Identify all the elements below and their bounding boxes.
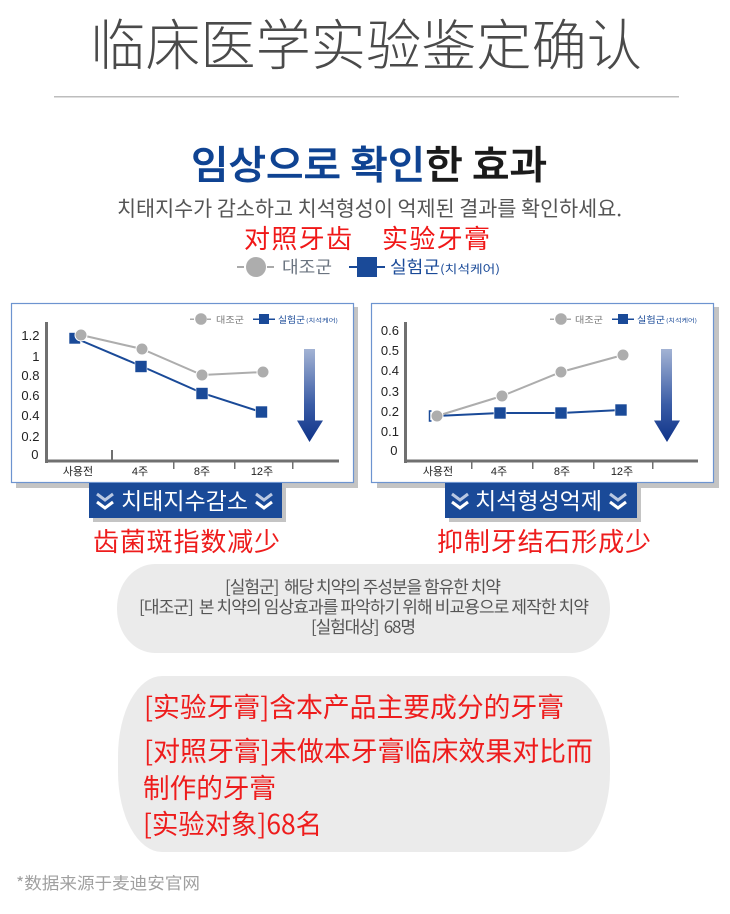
icon: down arrow: [654, 349, 680, 442]
chart legend: 실험군: [637, 313, 665, 326]
axes: [404, 322, 698, 469]
panel: chinese note: [对照牙膏]未做本牙膏临床效果对比而: [144, 730, 593, 769]
caption: plaque: 齿菌斑指数减少: [93, 522, 280, 559]
x axis labels: [63, 465, 273, 478]
panel: chinese note: [实验牙膏]含本产品主要成分的牙膏: [144, 686, 564, 725]
y axis labels: 0: [31, 447, 38, 462]
x axis labels: 12주: [611, 466, 633, 478]
main legend: 대조군: [282, 253, 332, 278]
chart legend: (치석케어): [306, 316, 338, 324]
chart legend: (치석케어): [666, 316, 697, 324]
banner: plaque reduction: 치태지수감소: [121, 482, 248, 516]
y axis labels: 0.2: [21, 429, 40, 444]
axes: [45, 322, 339, 469]
caption: calculus: 抑制牙结石形成少: [437, 522, 651, 559]
subheading: 치태지수가 감소하고 치석형성이 억제된 결과를 확인하세요.: [117, 193, 622, 223]
chart legend: 대조군: [216, 313, 244, 326]
panel: korean note: [실험군] 해당 치약의 주성분을 함유한 치약: [225, 573, 501, 598]
y axis labels: 0.1: [381, 424, 399, 439]
title: 临床医学实验鉴定确认: [90, 1, 642, 81]
chart legend: [190, 313, 338, 326]
icon: down arrow: [297, 349, 323, 442]
chart legend: 실험군: [278, 313, 305, 326]
series: experimental: [430, 404, 627, 421]
red labels: 实验牙膏: [382, 219, 490, 256]
y axis labels: 0.6: [21, 388, 40, 403]
y axis labels: 1: [32, 349, 40, 364]
y axis labels: 0.3: [381, 384, 399, 399]
x axis labels: 사용전: [63, 465, 93, 478]
y axis labels: 0: [390, 443, 398, 458]
y axis labels: 0.8: [21, 368, 40, 383]
x axis labels: 8주: [554, 466, 570, 478]
x axis labels: 12주: [251, 466, 273, 478]
banner: plaque reduction: [89, 482, 286, 522]
series: control: [75, 329, 269, 381]
y axis labels: 0.2: [381, 404, 399, 419]
red labels: 对照牙齿: [244, 219, 352, 256]
x axis labels: 4주: [491, 466, 507, 478]
y axis labels: 1.2: [21, 328, 40, 343]
panel: plaque index chart: [12, 304, 358, 488]
main legend: 실험군: [390, 253, 440, 278]
panel: korean note: [대조군] 본 치약의 임상효과를 파악하기 위해 비교용으로 제작한 치약: [139, 593, 589, 618]
y axis labels: 0.4: [381, 363, 399, 378]
x axis labels: 사용전: [423, 465, 453, 478]
x axis labels: [423, 465, 633, 478]
panel: korean note: [117, 564, 610, 653]
panel: chinese note: 制作的牙膏: [143, 767, 276, 806]
x axis labels: 4주: [132, 466, 148, 478]
footnote: *数据来源于麦迪安官网: [16, 870, 200, 894]
panel: chinese note: [实验对象]68名: [143, 803, 322, 842]
main legend: [237, 253, 500, 278]
main legend: (치석케어): [440, 261, 500, 277]
banner: calculus suppression: 치석형성억제: [475, 482, 602, 516]
panel: chinese note: [118, 676, 610, 852]
y axis labels: [21, 328, 40, 462]
series: experimental: [69, 332, 268, 418]
heading: clinical effect: 임상으로 확인 한 효과: [191, 135, 547, 191]
y axis labels: 0.5: [381, 343, 399, 358]
series: control: [431, 349, 629, 422]
banner: calculus suppression: [445, 482, 641, 522]
panel: korean note: [실험대상] 68명: [311, 613, 416, 638]
y axis labels: 0.4: [21, 408, 40, 423]
red labels: [244, 219, 490, 256]
x axis labels: 8주: [194, 466, 210, 478]
chart legend: 대조군: [575, 313, 603, 326]
panel: calculus chart: [372, 304, 719, 488]
y axis labels: [381, 323, 399, 458]
y axis labels: 0.6: [381, 323, 399, 338]
chart legend: [550, 313, 697, 326]
